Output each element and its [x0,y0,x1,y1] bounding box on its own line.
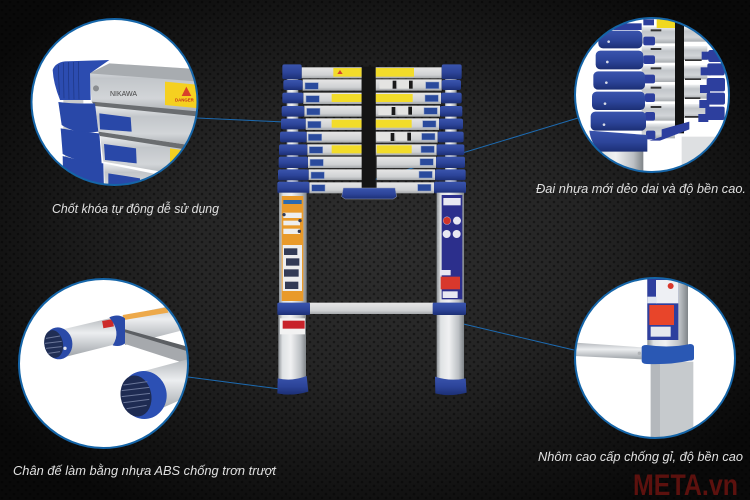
caption: aluminium tube: Nhôm cao cấp chống gỉ, độ bền cao [538,450,743,464]
detail circle: base feet [19,279,192,448]
ladder lower section [277,193,467,395]
leader line: base foot [188,377,280,389]
ladder upper section [277,64,466,199]
caption: base foot: Chân đế làm bằng nhựa ABS chống trơn trượt [13,463,277,478]
detail circle: aluminium tube [575,277,735,440]
ladder illustration [277,64,467,395]
caption: plastic band: Đai nhựa mới dẻo dai và độ bền cao. [536,182,746,196]
detail circle: plastic bands [575,18,729,173]
leader line: locking latch [197,118,307,123]
detail circle: locking latch: NIKAWA [110,91,137,98]
caption: locking latch: Chốt khóa tự động dễ sử dụng [52,201,219,216]
detail circle: locking latch: DANGER [175,97,195,102]
detail circle: locking latch [32,19,200,193]
leader line: aluminium tube [455,322,574,350]
leader line: plastic band [373,118,578,180]
